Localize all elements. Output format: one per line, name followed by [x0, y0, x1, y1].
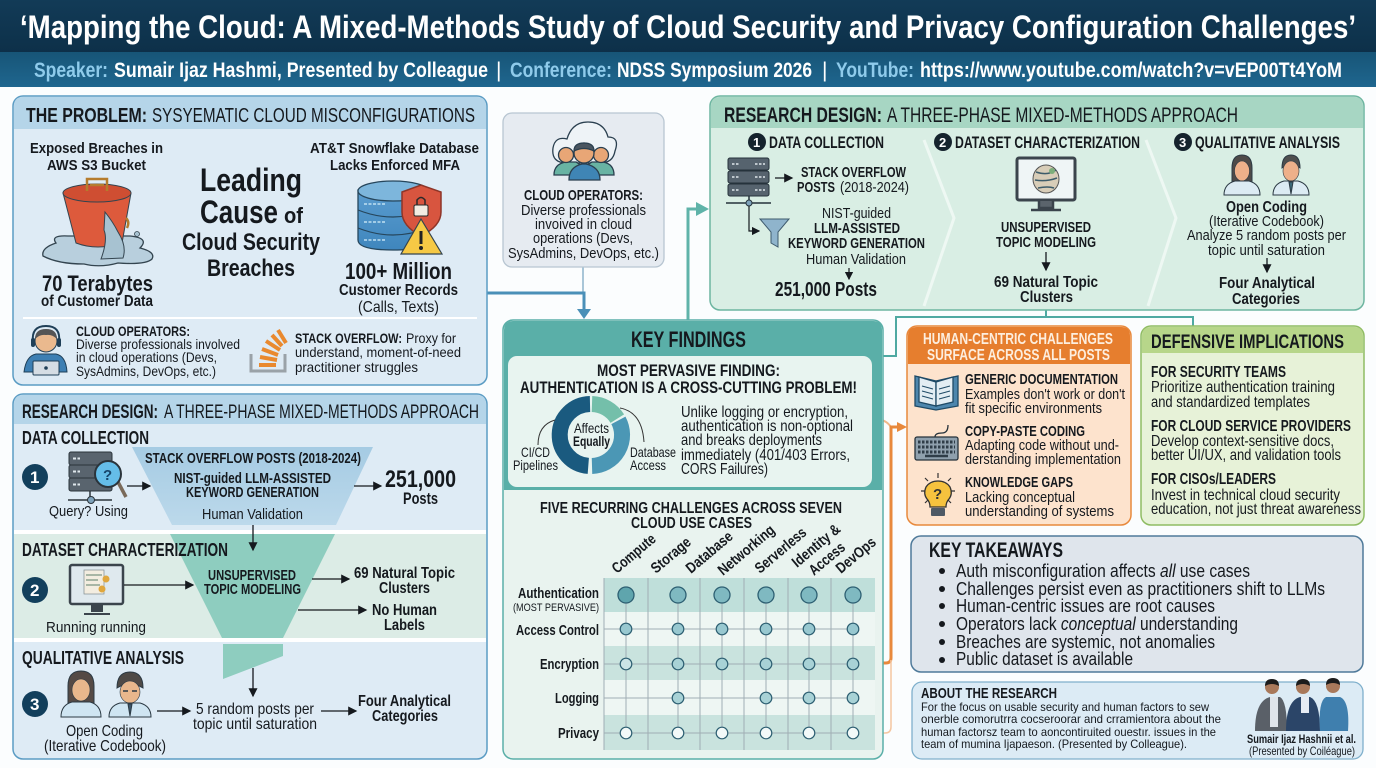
- funnel stage 1: STACK OVERFLOW POSTS (2018-2024): [145, 450, 361, 467]
- text: about description: onerble comorutrra cocseroorar and crramientora about the: [921, 712, 1221, 726]
- column: qualitative analysis: topic until saturation: [1208, 242, 1325, 259]
- text: authentication explanation: and breaks deployments: [681, 432, 822, 449]
- panel: key takeaways: [911, 536, 1363, 672]
- text: knowledge gaps: understanding of systems: [965, 503, 1114, 520]
- text: generic documentation: [965, 371, 1126, 417]
- column labels: Storage: [648, 534, 695, 577]
- chart: donut: Access: [630, 457, 666, 473]
- text: stack overflow: STACK OVERFLOW:: [295, 330, 402, 346]
- arrow: [298, 609, 366, 611]
- text: cloud operators: in cloud operations (Devs,: [76, 349, 217, 365]
- column: dataset characterization: DATASET CHARACTERIZATION: [955, 133, 1140, 152]
- speaker and conference bar: [0, 52, 1376, 87]
- chart: donut: Pipelines: [513, 457, 558, 473]
- heading: key takeaways: KEY TAKEAWAYS: [929, 539, 1063, 562]
- takeaway list: [956, 561, 1325, 669]
- text: for cloud service providers: Develop context-sensitive docs,: [1151, 433, 1334, 450]
- arrow: [1266, 258, 1268, 272]
- column: qualitative analysis: (Iterative Codebook): [1209, 213, 1324, 230]
- funnel stage 2: UNSUPERVISED: [208, 567, 296, 584]
- output: no human labels: No Human: [372, 602, 437, 619]
- text: S3 breach title: Exposed Breaches in: [30, 140, 163, 157]
- text: generic documentation: fit specific environments: [965, 400, 1102, 417]
- funnel stage 1: NIST-guided LLM-ASSISTED: [174, 470, 331, 487]
- stat: 100+ million: Customer Records: [339, 282, 458, 299]
- panel: human-centric challenges: [907, 326, 1131, 525]
- phase 1: data collection: [22, 428, 456, 525]
- arrow: [157, 710, 190, 712]
- speaker and conference bar: |: [496, 59, 501, 82]
- text: for security teams: Prioritize authentication training: [1151, 379, 1335, 396]
- phase 3: qualitative analysis: [22, 648, 451, 755]
- heading: key findings: KEY FINDINGS: [631, 327, 746, 352]
- text: for security teams: and standardized templates: [1151, 394, 1310, 411]
- heading: research design: A THREE-PHASE MIXED-METHODS APPROACH: [887, 104, 1238, 127]
- phase 1: data collection: Query? Using: [49, 503, 128, 520]
- funnel stage 1: [132, 447, 373, 525]
- column: data collection: KEYWORD GENERATION: [788, 235, 925, 252]
- icon: stack overflow: [251, 330, 286, 371]
- icon: leaking bucket: [43, 179, 153, 266]
- text: cloud operators: CLOUD OPERATORS:: [76, 323, 190, 339]
- speaker and conference bar: Sumair Ijaz Hashmi, Presented by Colleague: [114, 59, 488, 82]
- stat: 70 terabytes: [41, 271, 153, 310]
- row labels: Encryption: [540, 657, 599, 673]
- stat: 251,000 posts: Posts: [403, 489, 438, 508]
- arrow: [775, 177, 792, 179]
- panel: research design three phases: [710, 96, 1364, 310]
- text: stack overflow: understand, moment-of-need: [295, 344, 461, 360]
- icon: open book: [915, 376, 958, 410]
- icon: filter funnel: [749, 206, 789, 247]
- icon: light bulb: ?: [933, 486, 942, 503]
- funnel stage 2: TOPIC MODELING: [204, 581, 301, 598]
- text: cloud operators description: [508, 187, 659, 262]
- column labels: DevOps: [833, 534, 880, 577]
- arrow: [312, 578, 349, 580]
- text: leading cause: of: [284, 203, 304, 228]
- text: authentication explanation: CORS Failures): [681, 461, 768, 478]
- heading: research design: [724, 104, 1238, 127]
- text: generic documentation: Examples don't work or don't: [965, 386, 1126, 403]
- heading: human-centric challenges: [923, 331, 1113, 364]
- output: no human labels: Labels: [384, 617, 425, 634]
- arrow: [252, 668, 254, 696]
- column labels: Networking: [715, 522, 778, 579]
- icon: monitor with brain: [1017, 158, 1075, 210]
- chart: donut: Affects: [574, 420, 609, 436]
- text: cloud operators: [76, 323, 240, 379]
- text: S3 breach title: [30, 140, 163, 174]
- text: knowledge gaps: Lacking conceptual: [965, 489, 1075, 506]
- icon: database with shield and warning: [358, 181, 442, 254]
- row labels: Privacy: [558, 726, 599, 742]
- column labels: Compute: [609, 531, 659, 577]
- card: most pervasive finding: [508, 356, 872, 487]
- column: dataset characterization: UNSUPERVISED: [1001, 219, 1091, 236]
- text: copy-paste coding: [965, 423, 1121, 468]
- column: data collection: LLM-ASSISTED: [814, 220, 900, 237]
- column: qualitative analysis: Four Analytical: [1219, 275, 1315, 292]
- icon: keyboard: [915, 425, 958, 460]
- column: data collection: Human Validation: [806, 251, 906, 268]
- text: cloud operators: SysAdmins, DevOps, etc.): [76, 363, 216, 379]
- icon: monitor: [70, 565, 123, 614]
- text: knowledge gaps: [965, 474, 1114, 520]
- arrow: [848, 268, 850, 279]
- column labels: Serverless: [752, 524, 810, 577]
- connector: research design to implications: [883, 310, 1193, 356]
- text: leading cause: Cause: [200, 194, 278, 230]
- takeaway list: Breaches are systemic, not anomalies: [956, 632, 1215, 652]
- text: about description: For the focus on usable security and human factors to sew: [921, 700, 1209, 714]
- heading: the problem: SYSYEMATIC CLOUD MISCONFIGURATIONS: [152, 105, 475, 127]
- text: leading cause: Cloud Security: [182, 229, 321, 256]
- text: cloud operators description: CLOUD OPERATORS:: [524, 187, 643, 204]
- phase 2: dataset characterization: Running running: [46, 619, 146, 636]
- icon: cloud operator with laptop: [24, 326, 67, 375]
- markers: access control row: [620, 623, 859, 635]
- speaker and conference bar: |: [822, 59, 827, 82]
- card: most pervasive finding: AUTHENTICATION IS A CROSS-CUTTING PROBLEM!: [520, 378, 857, 397]
- markers: privacy row: [620, 727, 859, 739]
- icon: two researchers: [61, 671, 151, 717]
- stat: 251,000 posts: [385, 466, 456, 508]
- panel: defensive implications: [1141, 326, 1364, 525]
- text: cloud operators description: operations (Devs,: [533, 230, 633, 247]
- markers: logging row: [672, 692, 859, 704]
- panel: the problem: [13, 96, 487, 385]
- heading: five recurring challenges: FIVE RECURRING CHALLENGES ACROSS SEVEN: [540, 500, 842, 517]
- arrow: [124, 584, 193, 586]
- text: about description: team of mumina Ijapaeson. (Presented by Colleague).: [921, 737, 1187, 751]
- text: stack overflow: Proxy for: [406, 330, 456, 346]
- chart: donut: Equally: [573, 433, 610, 449]
- column: qualitative analysis: 3: [1179, 135, 1186, 150]
- icon: server with magnifier: ?: [103, 467, 112, 484]
- text: authentication explanation: authentication is non-optional: [681, 418, 853, 435]
- panel: about the research: [912, 678, 1363, 759]
- chart: challenge matrix: [604, 578, 875, 750]
- heading: research design: RESEARCH DESIGN:: [724, 104, 882, 127]
- column: dataset characterization: Clusters: [1020, 289, 1073, 306]
- phase 2: dataset characterization: 2: [30, 581, 39, 600]
- heading: human-centric challenges: HUMAN-CENTRIC CHALLENGES: [923, 331, 1113, 348]
- row labels: Logging: [555, 691, 599, 707]
- text: copy-paste coding: Adapting code without und-: [965, 437, 1119, 454]
- funnel stage 1: KEYWORD GENERATION: [186, 484, 319, 501]
- output: analytical categories: Four Analytical: [358, 693, 451, 710]
- text: for cisos: FOR CISOs/LEADERS: [1151, 471, 1276, 488]
- title banner: [0, 0, 1376, 52]
- output: topic clusters: [354, 565, 455, 597]
- row labels: [513, 586, 599, 742]
- icon: two researchers: [1224, 155, 1309, 195]
- text: for cisos: [1151, 471, 1361, 518]
- speaker and conference bar: YouTube:: [836, 59, 914, 82]
- column labels: Access: [806, 539, 849, 579]
- text: for security teams: [1151, 364, 1335, 411]
- bullets: [939, 568, 945, 663]
- funnel stage 2: [170, 534, 335, 679]
- text: copy-paste coding: COPY-PASTE CODING: [965, 423, 1085, 440]
- speaker and conference bar: Conference:: [510, 59, 612, 82]
- text: leading cause: Breaches: [207, 255, 295, 282]
- takeaway list: Challenges persist even as practitioners shift to LLMs: [956, 579, 1325, 599]
- text: open coding: Open Coding: [66, 723, 143, 740]
- card: most pervasive finding: MOST PERVASIVE FINDING:: [597, 361, 780, 380]
- photo: three researchers: [1255, 678, 1348, 731]
- column labels: [609, 521, 880, 579]
- takeaway list: Operators lack conceptual understanding: [956, 614, 1238, 634]
- heading: about the research: ABOUT THE RESEARCH: [921, 685, 1057, 702]
- icon: server with magnifier: [68, 452, 126, 504]
- phase 3: qualitative analysis: QUALITATIVE ANALYSIS: [22, 648, 184, 668]
- markers: encryption row: [620, 658, 859, 670]
- text: for cisos: Invest in technical cloud security: [1151, 487, 1340, 504]
- phase 2: dataset characterization: DATASET CHARACTERIZATION: [22, 540, 228, 560]
- output: topic clusters: Clusters: [379, 580, 430, 597]
- stat: 100+ million: [339, 258, 458, 316]
- text: authentication explanation: immediately (401/403 Errors,: [681, 447, 850, 464]
- text: stack overflow: [295, 330, 461, 375]
- text: cloud operators description: invoived in cloud: [535, 216, 632, 233]
- column: data collection: NIST-guided: [822, 205, 891, 222]
- arrow: [354, 485, 381, 487]
- text: knowledge gaps: KNOWLEDGE GAPS: [965, 474, 1073, 491]
- row labels: (MOST PERVASIVE): [513, 602, 599, 614]
- funnel stage 1: Human Validation: [202, 506, 303, 523]
- arrow: [127, 485, 150, 487]
- column: dataset characterization: 69 Natural Topic: [994, 274, 1098, 291]
- text: random posts: topic until saturation: [193, 716, 317, 733]
- text: AT&T title: [310, 140, 479, 174]
- takeaway list: Public dataset is available: [956, 649, 1133, 669]
- text: open coding: [44, 723, 166, 755]
- column: data collection: [726, 133, 925, 301]
- row labels: Access Control: [516, 623, 599, 639]
- arrow: [1045, 252, 1047, 270]
- stat: 100+ million: (Calls, Texts): [358, 299, 439, 316]
- speaker and conference bar: NDSS Symposium 2026: [617, 59, 812, 82]
- phase 1: data collection: 1: [30, 468, 39, 487]
- column: qualitative analysis: [1174, 133, 1346, 308]
- column: data collection: STACK OVERFLOW: [801, 164, 907, 181]
- column: dataset characterization: TOPIC MODELING: [996, 234, 1096, 251]
- text: about description: human factorsz team to aoncontiruited ouestır. issues in the: [921, 725, 1216, 739]
- stat: 100+ million: 100+ Million: [345, 258, 452, 284]
- text: for cloud service providers: [1151, 418, 1351, 464]
- row labels: Authentication: [518, 586, 599, 602]
- column: data collection: POSTS: [797, 179, 835, 196]
- chart: donut: CI/CD: [521, 444, 550, 460]
- panel: cloud operators card: [503, 113, 664, 267]
- panel: research design funnel: [13, 394, 487, 759]
- text: cloud operators: Diverse professionals involved: [76, 336, 240, 352]
- text: stack overflow: practitioner struggles: [295, 359, 418, 375]
- caption: presenters: [1247, 732, 1356, 758]
- heading: the problem: THE PROBLEM:: [26, 105, 147, 127]
- heading: human-centric challenges: SURFACE ACROSS ALL POSTS: [927, 347, 1110, 364]
- stat: 251,000 posts: 251,000: [385, 466, 456, 493]
- text: S3 breach title: AWS S3 Bucket: [47, 157, 146, 174]
- text: cloud operators description: Diverse professionals: [521, 202, 646, 219]
- arrow: [252, 525, 254, 550]
- takeaway list: Human-centric issues are root causes: [956, 596, 1215, 616]
- icon: server: [726, 158, 771, 206]
- text: generic documentation: GENERIC DOCUMENTATION: [965, 371, 1118, 388]
- heading: the problem: [26, 105, 475, 127]
- stat: 70 terabytes: of Customer Data: [41, 293, 153, 310]
- text: cloud operators description: SysAdmins, DevOps, etc.): [508, 245, 659, 262]
- output: analytical categories: [358, 693, 451, 725]
- stat: 70 terabytes: 70 Terabytes: [42, 271, 153, 296]
- speaker and conference bar: Speaker:: [34, 59, 108, 82]
- icon: light bulb: [921, 473, 955, 516]
- column: qualitative analysis: Open Coding: [1226, 199, 1307, 216]
- takeaway list: Auth misconfiguration affects all use cases: [956, 561, 1250, 581]
- heading: research design: A THREE-PHASE MIXED-METHODS APPROACH: [164, 402, 479, 423]
- connector: problem to key findings: [487, 267, 591, 319]
- column: data collection: 1: [753, 135, 760, 150]
- output: no human labels: [372, 602, 437, 634]
- column: data collection: (2018-2024): [840, 179, 909, 196]
- connector: key findings to research design: [688, 202, 709, 320]
- column: dataset characterization: [934, 133, 1140, 306]
- column: dataset characterization: 2: [939, 135, 946, 150]
- text: leading cause: Leading: [200, 162, 302, 198]
- output: topic clusters: 69 Natural Topic: [354, 565, 455, 582]
- text: for security teams: FOR SECURITY TEAMS: [1151, 364, 1286, 381]
- column labels: Database: [683, 528, 736, 577]
- phase 3: qualitative analysis: 3: [30, 695, 39, 714]
- chart: donut: Database: [630, 444, 676, 460]
- output: analytical categories: Categories: [372, 708, 438, 725]
- text: leading cause: [182, 162, 321, 282]
- column: data collection: DATA COLLECTION: [769, 133, 884, 152]
- markers: authentication row: [618, 587, 861, 603]
- column: qualitative analysis: Categories: [1232, 291, 1300, 308]
- panel: key findings: [503, 320, 883, 759]
- icon: cloud with people: [553, 122, 616, 180]
- phase 2: dataset characterization: [22, 525, 455, 679]
- text: random posts: 5 random posts per: [196, 701, 315, 718]
- heading: five recurring challenges: [540, 500, 842, 532]
- text: AT&T title: Lacks Enforced MFA: [330, 157, 460, 174]
- connector: findings to human-centric challenges: [860, 415, 907, 733]
- column: qualitative analysis: Analyze 5 random posts per: [1187, 227, 1346, 244]
- arrow: [321, 710, 356, 712]
- column: data collection: 251,000 Posts: [775, 279, 877, 301]
- heading: research design: RESEARCH DESIGN:: [22, 402, 158, 423]
- column labels: Identity &: [789, 521, 844, 571]
- phase 1: data collection: DATA COLLECTION: [22, 428, 149, 448]
- chart: donut: [513, 404, 676, 473]
- text: random posts: [193, 701, 317, 733]
- text: open coding: (Iterative Codebook): [44, 738, 166, 755]
- text: authentication explanation: [681, 404, 853, 478]
- text: copy-paste coding: derstanding implementation: [965, 451, 1121, 468]
- text: AT&T title: AT&T Snowflake Database: [310, 140, 479, 157]
- text: authentication explanation: Unlike logging or encryption,: [681, 404, 848, 421]
- text: about description: [921, 700, 1221, 751]
- heading: research design: [22, 402, 479, 423]
- heading: five recurring challenges: CLOUD USE CASES: [631, 515, 752, 532]
